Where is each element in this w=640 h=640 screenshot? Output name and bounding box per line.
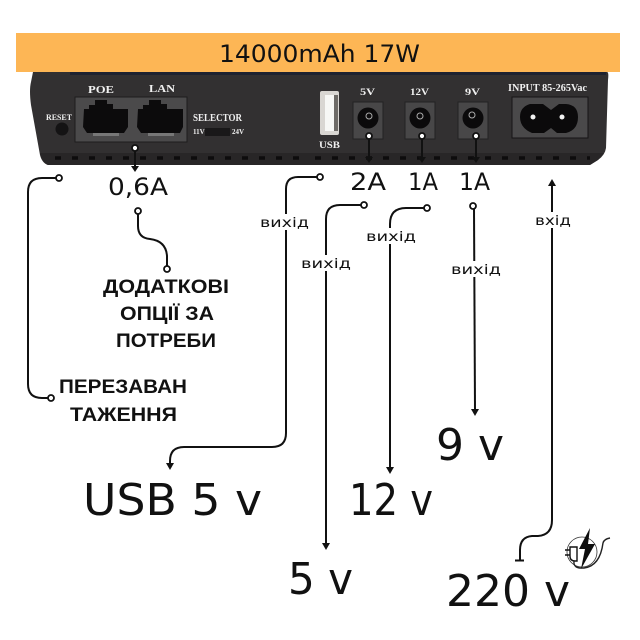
arrow: 9V port xyxy=(472,133,480,163)
arrow: POE current xyxy=(131,145,139,172)
label: 12V output xyxy=(365,228,417,245)
arrow: 12V output xyxy=(386,205,430,474)
text: optional features: ПОТРЕБИ xyxy=(116,331,216,352)
current: 1A 9V: 1A xyxy=(459,168,491,196)
icon: power inlet xyxy=(512,97,588,138)
text: optional features: ОПЦІЇ ЗА xyxy=(120,304,214,325)
title banner xyxy=(16,33,620,72)
arrow: 9V output xyxy=(470,203,479,416)
label: USB output: вихід xyxy=(260,216,309,231)
label: 9V output: вихід xyxy=(451,263,501,278)
device back panel: 24V xyxy=(232,128,244,136)
label: 5V port: 5V xyxy=(360,88,375,98)
label: input xyxy=(534,212,572,229)
label: 5V output xyxy=(300,255,352,272)
label: USB: USB xyxy=(319,141,341,151)
arrow: 220V input xyxy=(515,179,556,560)
label: selector: SELECTOR xyxy=(193,113,243,124)
connector: reset xyxy=(28,175,62,401)
label: input: INPUT 85-265Vac xyxy=(508,83,588,94)
label: 5V output: вихід xyxy=(301,257,351,272)
label: 12V port: 12V xyxy=(410,88,429,98)
icon: USB port xyxy=(320,91,339,135)
label: reset: RESET xyxy=(46,113,73,122)
text: reset xyxy=(59,377,187,426)
icon: 12V jack xyxy=(405,102,435,139)
label: input: вхід xyxy=(535,214,571,229)
label: 12V output: вихід xyxy=(366,230,416,245)
label: LAN: LAN xyxy=(149,83,175,95)
icon: reset hole xyxy=(56,122,68,136)
icon: 5V jack xyxy=(353,102,383,139)
voltage: 9 v: 9 v xyxy=(436,420,504,471)
voltage: 220 v: 220 v xyxy=(446,566,570,617)
title text: 14000mAh 17W xyxy=(219,40,420,68)
text: reset: ТАЖЕННЯ xyxy=(70,405,177,426)
voltage: 5 v: 5 v xyxy=(288,554,353,605)
arrow: 5V output xyxy=(322,202,367,550)
arrow: 12V port xyxy=(418,133,426,163)
voltage: 12 v: 12 v xyxy=(349,475,433,526)
voltage: USB 5 v: USB 5 v xyxy=(83,475,262,526)
current: 2A: 2A xyxy=(350,168,387,196)
label: 9V output xyxy=(450,261,502,278)
label: selector values: 11V xyxy=(193,128,205,136)
icon: plug with lightning xyxy=(565,528,610,569)
label: USB output xyxy=(258,214,310,231)
device back panel xyxy=(30,72,608,165)
arrow: 5V port xyxy=(365,133,373,163)
label: POE: POE xyxy=(88,84,114,96)
label: 9V port: 9V xyxy=(465,88,480,98)
text: optional features: ДОДАТКОВІ xyxy=(103,277,229,298)
text: optional features xyxy=(103,277,229,352)
icon: 9V jack xyxy=(458,102,488,139)
icon: ethernet ports xyxy=(75,97,187,142)
arrow: USB output xyxy=(166,174,323,470)
current: 1A 12V: 1A xyxy=(408,168,439,196)
text: reset: ПЕРЕЗАВАН xyxy=(59,377,187,398)
ventilation slots xyxy=(55,156,590,160)
current: 0,6A: 0,6A xyxy=(108,173,169,201)
connector: optional features xyxy=(135,208,170,272)
icon: selector switch xyxy=(205,128,230,136)
